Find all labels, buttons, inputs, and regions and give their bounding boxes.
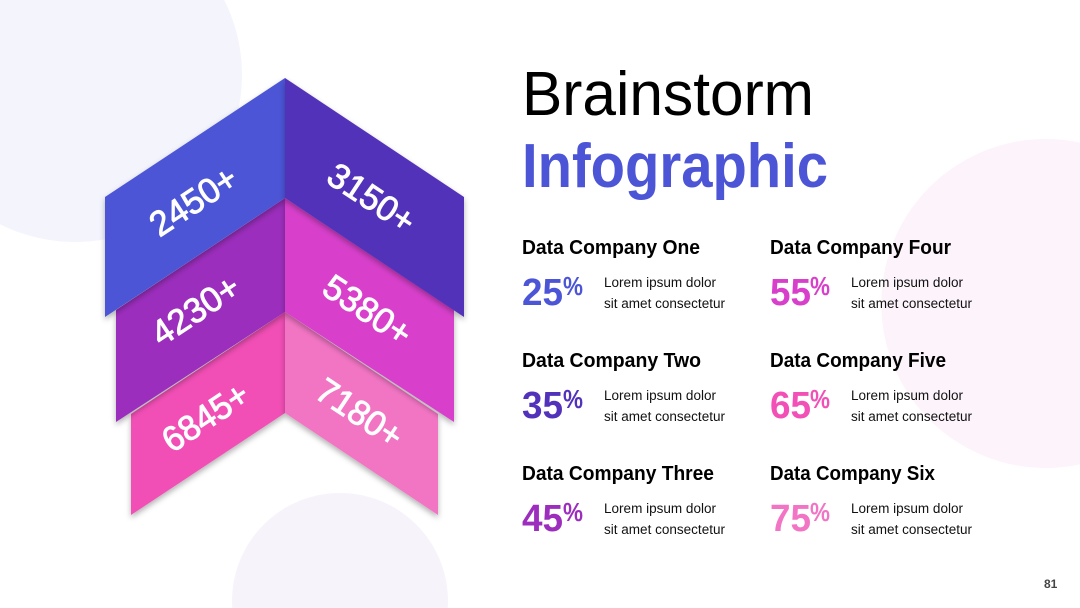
item: Data Company One — [522, 237, 725, 314]
item: Data Company Two — [522, 350, 725, 427]
item: Data Company Five: % — [810, 384, 830, 414]
item: Data Company Six — [770, 463, 972, 540]
value: 5380+: 5380+ — [316, 267, 419, 354]
title line: Brainstorm: Brainstorm — [522, 60, 814, 129]
item: Data Company One: sit amet consectetur — [604, 296, 725, 311]
item: Data Company Two: Lorem ipsum dolor — [604, 388, 717, 403]
chevron stack — [105, 78, 464, 515]
item: Data Company Four — [770, 237, 972, 314]
item: Data Company Five: Data Company Five — [770, 350, 946, 372]
item: Data Company Five — [770, 350, 972, 427]
item: Data Company Four: Data Company Four — [770, 237, 951, 259]
page number: 81 — [1044, 577, 1058, 591]
value: 2450+: 2450+ — [142, 158, 245, 244]
chevron: top tier — [105, 78, 464, 317]
item: Data Company Four: Lorem ipsum dolor — [851, 275, 964, 290]
title — [522, 60, 828, 201]
title line: Infographic: Infographic — [522, 132, 828, 201]
item: Data Company Three: Data Company Three — [522, 463, 714, 485]
background circle: top left — [0, 0, 242, 242]
item: Data Company Six: Data Company Six — [770, 463, 935, 485]
item: Data Company Two: 35 — [522, 385, 563, 427]
item: Data Company Three: 45 — [522, 498, 563, 540]
item: Data Company Four: % — [810, 271, 830, 301]
chevron: bottom tier — [131, 312, 438, 515]
item: Data Company Six: % — [810, 497, 830, 527]
top left panel — [105, 78, 285, 317]
value: 7180+: 7180+ — [309, 371, 410, 456]
background circle: bottom — [232, 493, 448, 608]
value: 6845+: 6845+ — [155, 375, 256, 460]
top right panel — [285, 78, 464, 317]
background circle: right — [881, 139, 1080, 468]
item: Data Company Six: 75 — [770, 498, 811, 540]
item: Data Company One: Lorem ipsum dolor — [604, 275, 717, 290]
bottom right panel — [285, 312, 438, 515]
item: Data Company Five: 65 — [770, 385, 811, 427]
item: Data Company Four: sit amet consectetur — [851, 296, 972, 311]
chevron: middle tier — [116, 198, 454, 422]
item: Data Company Six: Lorem ipsum dolor — [851, 501, 964, 516]
item: Data Company Six: sit amet consectetur — [851, 522, 972, 537]
item: Data Company One: % — [563, 271, 583, 301]
value: 4230+: 4230+ — [144, 267, 247, 354]
item: Data Company Five: Lorem ipsum dolor — [851, 388, 964, 403]
item: Data Company Two: sit amet consectetur — [604, 409, 725, 424]
bottom left panel — [131, 312, 285, 515]
item: Data Company Three: % — [563, 497, 583, 527]
item: Data Company Three: Lorem ipsum dolor — [604, 501, 717, 516]
middle right panel — [285, 198, 454, 422]
item: Data Company One: Data Company One — [522, 237, 700, 259]
middle left panel — [116, 198, 285, 422]
item: Data Company Five: sit amet consectetur — [851, 409, 972, 424]
value: 3150+: 3150+ — [320, 155, 423, 241]
item: Data Company Two: % — [563, 384, 583, 414]
item: Data Company Two: Data Company Two — [522, 350, 701, 372]
item: Data Company Four: 55 — [770, 272, 811, 314]
item: Data Company One: 25 — [522, 272, 563, 314]
item: Data Company Three: sit amet consectetur — [604, 522, 725, 537]
item: Data Company Three — [522, 463, 725, 540]
